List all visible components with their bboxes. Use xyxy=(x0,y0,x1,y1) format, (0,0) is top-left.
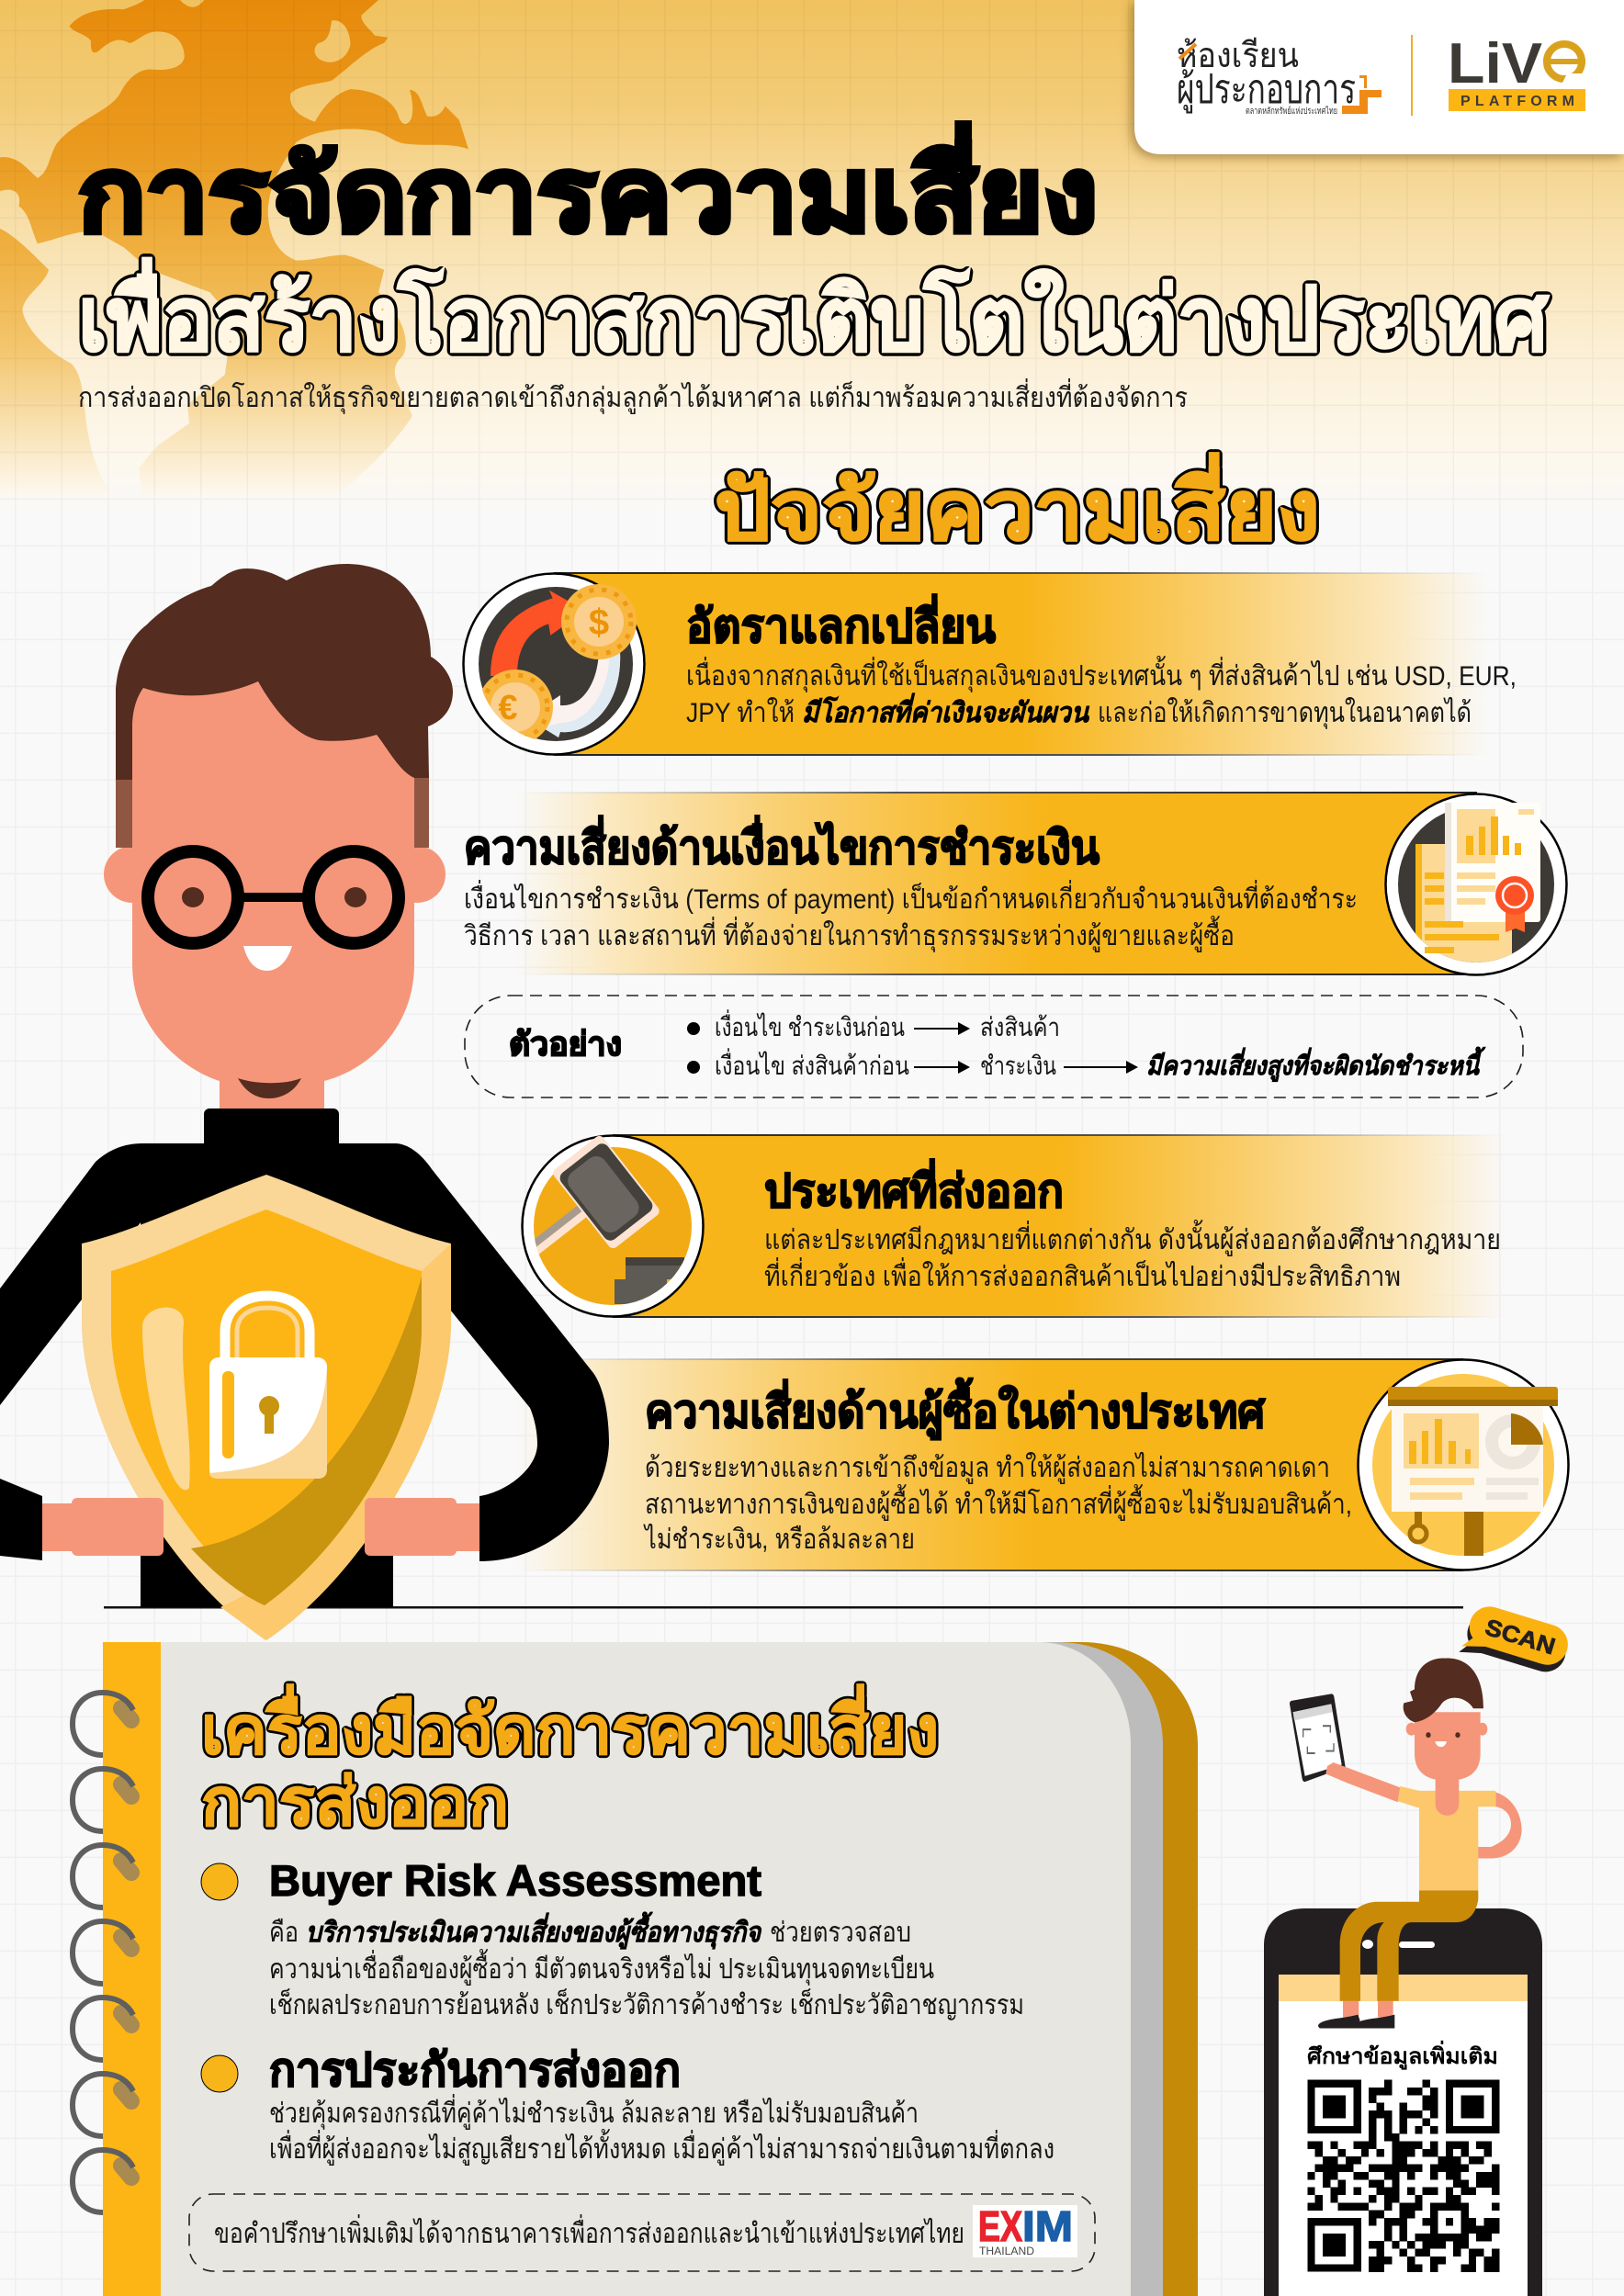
body text: ที่เกี่ยวข้อง เพื่อให้การส่งออกสินค้าเป็นไปอย่างมีประสิทธิภาพ xyxy=(764,1257,1401,1292)
heading: ประเทศที่ส่งออก xyxy=(764,1159,1064,1217)
icon: gavel xyxy=(522,1134,704,1317)
head xyxy=(1406,1712,1487,1781)
example row 1: เงื่อนไข ชำระเงินก่อน xyxy=(715,1009,905,1041)
body text xyxy=(643,1451,1352,1555)
text: buyer risk assessment xyxy=(269,1911,1024,2020)
phone with QR code xyxy=(1264,1908,1542,2296)
logo: LiVe platform xyxy=(1448,32,1587,111)
hair xyxy=(116,564,453,780)
face details xyxy=(1426,1732,1460,1747)
subheading: export insurance: การประกันการส่งออก xyxy=(269,2044,681,2096)
heading: เครื่องมือจัดการความเสี่ยง xyxy=(201,1683,939,1768)
heading: การส่งออก xyxy=(201,1766,509,1840)
panel: exchange rate xyxy=(463,572,1517,756)
body text: มีโอกาสที่ค่าเงินจะผันผวน xyxy=(802,692,1089,728)
bullet xyxy=(201,2055,238,2092)
heading: ความเสี่ยงด้านผู้ซื้อในต่างประเทศ xyxy=(645,1378,1266,1440)
QR caption: ศึกษาข้อมูลเพิ่มเติม xyxy=(1307,2040,1498,2070)
text: export insurance: ช่วยคุ้มครองกรณีที่คู่ค้าไม่ชำระเงิน ล้มละลาย หรือไม่รับมอบสินค้า xyxy=(269,2094,919,2131)
example row 2 xyxy=(687,1046,1486,1082)
callout: EXIM advice xyxy=(189,2194,1095,2271)
logo: classroom for entrepreneurs: ตลาดหลักทรัพย์แห่งประเทศไทย xyxy=(1246,106,1337,117)
body text: สถานะทางการเงินของผู้ซื้อได้ ทำให้มีโอกาสที่ผู้ซื้อจะไม่รับมอบสินค้า, xyxy=(645,1484,1352,1521)
logo: classroom for entrepreneurs xyxy=(1177,37,1382,117)
subtitle: การส่งออกเปิดโอกาสให้ธุรกิจขยายตลาดเข้าถึงกลุ่มลูกค้าได้มหาศาล แต่ก็มาพร้อมความเสี่ยงที่ต้องจัดการ xyxy=(78,378,1188,415)
divider line xyxy=(104,1606,1463,1609)
body text xyxy=(764,1220,1501,1292)
world map backdrop xyxy=(0,0,468,495)
icon: currency exchange: $ xyxy=(589,602,609,643)
text: buyer risk assessment: คือ xyxy=(269,1918,299,1948)
face xyxy=(132,643,414,1087)
icon: currency exchange xyxy=(463,573,645,755)
example row 1: ส่งสินค้า xyxy=(980,1013,1060,1041)
logo: classroom for entrepreneurs: ผู้ประกอบการ xyxy=(1177,67,1356,114)
eyes xyxy=(182,887,367,907)
chin shadow xyxy=(238,1078,301,1098)
callout: example xyxy=(465,996,1523,1097)
body text: เงื่อนไขการชำระเงิน (Terms of payment) เป็นข้อกำหนดเกี่ยวกับจำนวนเงินที่ต้องชำระ xyxy=(464,880,1358,915)
callout: EXIM advice: ขอคำปรึกษาเพิ่มเติมได้จากธนาคารเพื่อการส่งออกและนำเข้าแห่งประเทศไทย xyxy=(214,2214,964,2249)
icon: documents xyxy=(1385,793,1567,975)
title: การจัดการความเสี่ยง xyxy=(78,122,1098,253)
text: export insurance: เพื่อที่ผู้ส่งออกจะไม่สูญเสียรายได้ทั้งหมด เมื่อคู่ค้าไม่สามารถจ่ายเงินตามที่ตกลง xyxy=(269,2129,1054,2166)
arm xyxy=(1325,1762,1400,1802)
icon: presentation board xyxy=(1358,1359,1569,1570)
logo: LiVe platform: PLATFORM xyxy=(1460,94,1574,109)
notebook pages xyxy=(103,1642,1198,2296)
text: export insurance xyxy=(269,2094,1054,2166)
heading xyxy=(201,1683,939,1840)
heading: risk factors: ปัจจัยความเสี่ยง xyxy=(715,453,1320,557)
heading: risk factors: ปัจจัยความเสี่ยง xyxy=(715,453,1320,557)
ears xyxy=(104,846,445,903)
sideburns xyxy=(116,777,429,848)
example row 2: มีความเสี่ยงสูงที่จะผิดนัดชำระหนี้ xyxy=(1146,1046,1486,1082)
title xyxy=(78,122,1550,369)
body text: แต่ละประเทศมีกฎหมายที่แตกต่างกัน ดังนั้นผู้ส่งออกต้องศึกษากฎหมาย xyxy=(764,1220,1501,1256)
body text: วิธีการ เวลา และสถานที่ ที่ต้องจ่ายในการทำธุรกรรมระหว่างผู้ขายและผู้ซื้อ xyxy=(464,916,1235,953)
left forearm xyxy=(0,1479,42,1560)
hands xyxy=(42,1498,479,1556)
panel: payment terms xyxy=(464,792,1566,975)
QR code xyxy=(1307,2080,1499,2272)
trousers xyxy=(1340,1890,1478,2001)
right arm xyxy=(1473,1792,1522,1858)
heading: เครื่องมือจัดการความเสี่ยง xyxy=(201,1683,939,1768)
hair xyxy=(1404,1659,1483,1722)
panel: destination country xyxy=(522,1134,1506,1318)
heading: ความเสี่ยงด้านเงื่อนไขการชำระเงิน xyxy=(464,816,1100,873)
body text: ไม่ชำระเงิน, หรือล้มละลาย xyxy=(643,1523,915,1555)
text: buyer risk assessment: บริการประเมินความเสี่ยงของผู้ซื้อทางธุรกิจ xyxy=(306,1911,762,1950)
body text: และก่อให้เกิดการขาดทุนในอนาคตได้ xyxy=(1098,696,1472,730)
speech bubble: scan xyxy=(1459,1601,1573,1683)
heading: การส่งออก xyxy=(201,1766,509,1840)
bullet xyxy=(201,1863,238,1900)
black sweater xyxy=(0,1143,609,1607)
body text: JPY ทำให้ xyxy=(686,697,795,728)
shield xyxy=(82,1175,451,1640)
subheading: buyer risk assessment: Buyer Risk Assessment xyxy=(269,1856,761,1905)
glasses xyxy=(148,851,399,943)
speech bubble: scan: SCAN xyxy=(1483,1615,1558,1660)
ankles xyxy=(1343,2000,1393,2018)
text: buyer risk assessment: เช็กผลประกอบการย้อนหลัง เช็กประวัติการค้างชำระ เช็กประวัติอาชญากรรม xyxy=(269,1987,1024,2020)
example row 2: เงื่อนไข ส่งสินค้าก่อน xyxy=(715,1048,909,1080)
logo: EXIM Thailand: THAILAND xyxy=(979,2245,1034,2257)
neck xyxy=(1436,1776,1459,1816)
example row 2: ชำระเงิน xyxy=(980,1052,1056,1080)
turtleneck xyxy=(204,1109,339,1164)
shirt xyxy=(1398,1786,1495,1890)
text: buyer risk assessment: ช่วยตรวจสอบ xyxy=(770,1918,911,1948)
title: เพื่อสร้างโอกาสการเติบโตในต่างประเทศ xyxy=(78,257,1550,369)
tablet xyxy=(1290,1694,1346,1782)
body text xyxy=(464,880,1358,953)
character scanning with tablet xyxy=(1290,1659,1522,2029)
example label: ตัวอย่าง xyxy=(509,1025,622,1063)
body text xyxy=(686,656,1517,730)
smile xyxy=(243,946,292,971)
logo: LiVe platform: LiV xyxy=(1448,32,1542,96)
panel: notebook export risk tools xyxy=(73,1642,1198,2296)
shoes xyxy=(1318,2015,1394,2029)
logo: EXIM Thailand: EX xyxy=(978,2202,1022,2250)
logo: EXIM Thailand: IM xyxy=(1022,2202,1073,2250)
neck xyxy=(220,1056,324,1120)
text: buyer risk assessment: ความน่าเชื่อถือของผู้ซื้อว่า มีตัวตนจริงหรือไม่ ประเมินทุนจดทะเบียน xyxy=(269,1949,934,1986)
logo: classroom for entrepreneurs: ห้องเรียน xyxy=(1177,37,1299,75)
panel: foreign buyer risk xyxy=(514,1358,1569,1571)
spiral rings xyxy=(73,1693,133,2212)
icon: currency exchange: € xyxy=(498,689,518,727)
character with shield xyxy=(0,564,609,1640)
example row 1 xyxy=(687,1009,1060,1041)
padlock xyxy=(209,1296,327,1479)
heading: อัตราแลกเปลี่ยน xyxy=(686,594,996,652)
logo card xyxy=(1134,0,1624,154)
body text: ด้วยระยะทางและการเข้าถึงข้อมูล ทำให้ผู้ส่งออกไม่สามารถคาดเดา xyxy=(645,1451,1330,1484)
logo: EXIM Thailand xyxy=(973,2202,1077,2257)
title: เพื่อสร้างโอกาสการเติบโตในต่างประเทศ xyxy=(78,257,1550,369)
body text: เนื่องจากสกุลเงินที่ใช้เป็นสกุลเงินของประเทศนั้น ๆ ที่ส่งสินค้าไป เช่น USD, EUR, xyxy=(686,656,1517,693)
